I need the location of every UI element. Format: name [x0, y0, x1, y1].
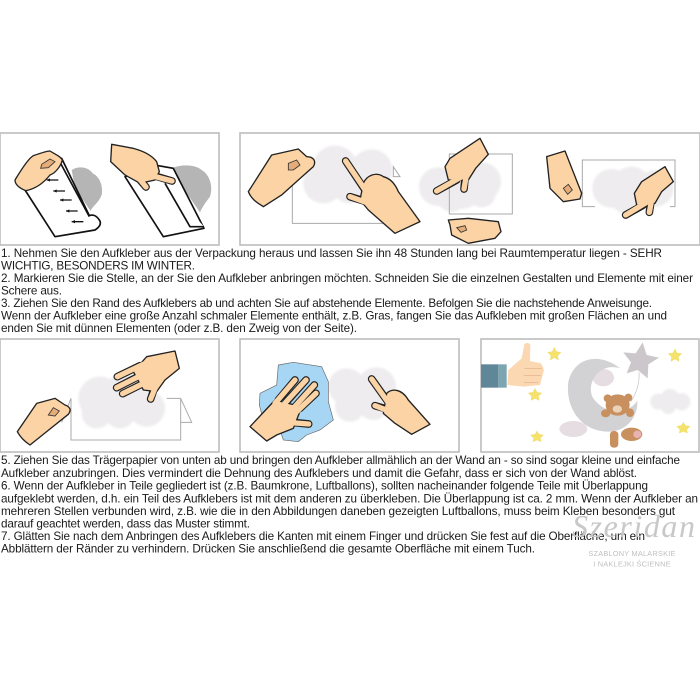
text block: instructions 5 to 7: 7. Glätten Sie nach dem Anbringen des Aufklebers die Kanten mit einem Finger und drücken Sie fest auf die Oberfläche, um ein	[1, 530, 645, 543]
text block: instructions 1 to 3: Wenn der Aufkleber eine große Anzahl schmaler Elemente enthält, z.B. Gras, fangen Sie das Aufkleben mit großen Flächen an und	[1, 310, 667, 322]
panel: step 7 wipe with cloth	[240, 339, 459, 452]
icon: teddy bear	[601, 394, 642, 448]
text block: instructions 1 to 3: 3. Ziehen Sie den Rand des Aufklebers ab und achten Sie auf abstehende Elemente. Befolgen Sie die nachstehende Anweisunge.	[1, 297, 652, 310]
text block: instructions 1 to 3: 2. Markieren Sie die Stelle, an der Sie den Aufkleber anbringen möchten. Schneiden Sie die einzelnen Gestalten und Elemente mit einer	[1, 272, 693, 285]
text block: instructions 5 to 7: aufgeklebt werden, d.h. ein Teil des Aufklebers ist mit dem anderen zu überkleben. Die Überlappung ist ca. 2 mm. Wenn der Aufkleber an	[1, 492, 698, 506]
sheet outline two	[449, 154, 512, 214]
panel: finished result	[481, 339, 699, 452]
watermark: Szeridan logo: SZABLONY MALARSKIE	[588, 549, 676, 558]
icon: grey wall shadow left	[72, 167, 102, 211]
icon: hand holding from bottom	[448, 218, 501, 243]
icon: cloud sticker four	[78, 374, 165, 428]
icon: cloud sticker two	[419, 162, 501, 212]
text block: instructions 1 to 3	[1, 247, 693, 335]
panel: steps 1 peel backing	[0, 133, 219, 245]
icon: lower-left hand	[17, 398, 70, 445]
watermark: Szeridan logo: Szeridan	[572, 508, 695, 544]
icon: hand gripping left edge	[547, 151, 582, 202]
icon: flat smoothing hand	[117, 351, 179, 399]
panel: step 2 positioning	[240, 133, 700, 245]
sheet outline three	[582, 160, 675, 207]
icon: cloud sticker one	[303, 146, 392, 203]
backing sheet outline	[62, 398, 192, 440]
text block: instructions 5 to 7: Aufkleber anzubringen. Dies vermindert die Dehnung des Aufklebers und damit die Gefahr, dass er sich von der Wand ablöst.	[1, 467, 637, 480]
icon: small clouds behind moon	[559, 369, 614, 437]
text block: instructions 5 to 7	[1, 454, 698, 556]
text block: instructions 1 to 3: Schere aus.	[1, 284, 62, 298]
text block: instructions 1 to 3: enden Sie mit dünnen Elementen (oder z.B. den Zweig von der Seite).	[1, 322, 357, 335]
text block: instructions 5 to 7: mehreren Stellen verbunden wird, z.B. wie die in den Abbildungen daneben gezeigten Luftballons, muss beim Kleben besonders gut	[1, 505, 676, 518]
icon: hand pointing right	[626, 167, 673, 215]
icon: pointing hand	[346, 161, 420, 233]
icon: hand on cloth	[250, 380, 316, 441]
icon: cloud sticker three	[592, 167, 673, 213]
watermark: Szeridan logo: I NAKLEJKI ŚCIENNE	[593, 560, 671, 568]
text block: instructions 1 to 3: 1. Nehmen Sie den Aufkleber aus der Verpackung heraus und lassen Sie ihn 48 Stunden lang bei Raumtemperatur liegen - SEHR	[1, 247, 662, 260]
icon: blue cloth	[259, 362, 333, 442]
text block: instructions 5 to 7: darauf geachtet werden, dass das Muster stimmt.	[1, 518, 250, 530]
text block: instructions 5 to 7: Abblättern der Ränder zu verhindern. Drücken Sie anschließend die gesamte Oberfläche mit einem Tuch.	[1, 542, 535, 556]
icon: hand peeling corner	[15, 151, 62, 191]
icon: pointing hand smoothing edge	[372, 379, 430, 434]
icon: backing sheet flat	[125, 166, 204, 237]
watermark: Szeridan logo	[572, 508, 695, 568]
text block: instructions 5 to 7: 5. Ziehen Sie das Trägerpapier von unten ab und bringen den Aufkleber allmählich an der Wand an - so sind sogar kleine und einfache	[1, 454, 680, 467]
icon: yellow stars	[528, 347, 690, 442]
icon: cloud sticker five	[328, 367, 396, 422]
icon: cloud at right	[650, 389, 690, 414]
icon: crescent moon	[568, 359, 637, 432]
icon: hand pressing sheet	[111, 144, 172, 187]
icon: star balloon	[623, 342, 659, 402]
panel: step 5 peel from below	[0, 339, 219, 452]
icon: hand pointing from top	[437, 138, 488, 191]
sheet outline one	[292, 167, 400, 223]
icon: left hand holding	[248, 149, 315, 207]
icon: rolled backing sheet	[25, 158, 100, 237]
icon: grey wall shadow right	[173, 165, 211, 212]
text block: instructions 1 to 3: WICHTIG, BESONDERS IM WINTER.	[1, 260, 195, 272]
icon: thumbs up	[481, 343, 544, 388]
text block: instructions 5 to 7: 6. Wenn der Aufkleber in Teile gegliedert ist (z.B. Baumkrone, Luftballons), sollten nacheinander folgende Teile mit Überlappung	[1, 480, 648, 492]
